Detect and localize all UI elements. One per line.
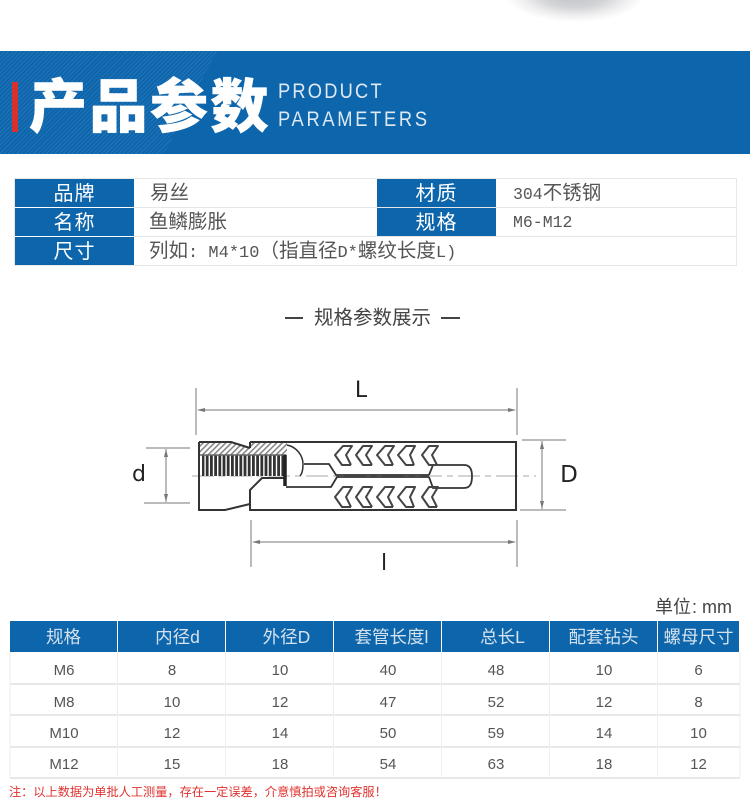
material value: 304不锈钢 bbox=[513, 183, 601, 205]
row M6: 6 bbox=[694, 662, 703, 679]
specification value: M6-M12 bbox=[513, 213, 572, 232]
dimension D bbox=[520, 440, 578, 510]
specification label bbox=[377, 208, 496, 236]
brand value: 易丝 bbox=[150, 183, 189, 205]
row M10: M10 bbox=[49, 725, 79, 742]
dimension d: d bbox=[132, 462, 146, 487]
row M6 bbox=[54, 662, 703, 679]
dimension D: D bbox=[560, 462, 578, 488]
size label bbox=[15, 237, 134, 265]
anchor body bbox=[199, 442, 516, 510]
row M10: 50 bbox=[380, 725, 396, 742]
dimension L bbox=[196, 378, 517, 435]
row M12: 12 bbox=[690, 756, 707, 773]
banner subtitle bbox=[278, 79, 430, 130]
row M10: 12 bbox=[164, 725, 180, 742]
red accent bar bbox=[12, 82, 18, 132]
anchor diagram bbox=[132, 378, 578, 576]
row M8: M8 bbox=[54, 694, 74, 711]
size label: 尺寸 bbox=[54, 241, 96, 263]
spec table bbox=[14, 178, 737, 266]
bottom row of chevrons bbox=[335, 487, 438, 507]
table header: 套管长度l bbox=[355, 627, 428, 647]
table header: 外径D bbox=[263, 627, 310, 647]
brand label: 品牌 bbox=[54, 183, 96, 205]
row M12: 15 bbox=[164, 756, 180, 773]
row M10 bbox=[49, 725, 707, 742]
banner bbox=[0, 51, 750, 154]
hatched cone section bbox=[199, 442, 250, 455]
dimension L: L bbox=[355, 378, 368, 403]
row M8 bbox=[54, 694, 703, 711]
banner hatch pattern bbox=[0, 51, 220, 154]
material label bbox=[377, 179, 496, 207]
dimension d bbox=[132, 448, 190, 503]
unit label: 单位: mm bbox=[655, 597, 732, 617]
table header: 内径d bbox=[155, 627, 200, 647]
row M8: 12 bbox=[596, 694, 612, 711]
row M8: 47 bbox=[380, 694, 396, 711]
section heading: 规格参数展示 bbox=[314, 307, 431, 329]
row M12: 18 bbox=[272, 756, 288, 773]
row M8: 52 bbox=[488, 694, 504, 711]
row M6: 10 bbox=[596, 662, 612, 679]
banner subtitle: PARAMETERS bbox=[278, 106, 430, 130]
banner title: 产品参数 bbox=[29, 60, 271, 144]
data table bbox=[10, 621, 740, 779]
row M8: 12 bbox=[272, 694, 288, 711]
row M8: 10 bbox=[164, 694, 180, 711]
table grid bbox=[10, 652, 740, 779]
row M10: 14 bbox=[596, 725, 612, 742]
row M10: 10 bbox=[690, 725, 707, 742]
brand label bbox=[15, 179, 134, 207]
footnote: 注：以上数据为单批人工测量，存在一定误差，介意慎拍或咨询客服！ bbox=[9, 782, 387, 800]
row M10: 59 bbox=[488, 725, 504, 742]
row M12: 63 bbox=[488, 756, 504, 773]
top row of chevrons bbox=[335, 446, 438, 465]
table header bbox=[10, 621, 739, 652]
row M6: 8 bbox=[168, 662, 176, 679]
row dividers bbox=[133, 207, 737, 208]
row M12: 18 bbox=[596, 756, 612, 773]
row M10: 14 bbox=[272, 725, 288, 742]
name label: 名称 bbox=[54, 212, 96, 234]
row M6: 48 bbox=[488, 662, 504, 679]
table header: 规格 bbox=[46, 627, 81, 647]
name label bbox=[15, 208, 134, 236]
table header: 螺母尺寸 bbox=[664, 627, 734, 647]
row M6: 10 bbox=[272, 662, 288, 679]
dimension l bbox=[251, 520, 517, 576]
row M12 bbox=[49, 756, 707, 773]
material label: 材质 bbox=[416, 183, 458, 205]
banner subtitle: PRODUCT bbox=[278, 79, 384, 103]
row M6: M6 bbox=[54, 662, 74, 679]
table header: 总长L bbox=[480, 627, 525, 647]
dimension l: l bbox=[381, 551, 387, 576]
top shadow blur bbox=[505, 0, 645, 22]
row M8: 8 bbox=[694, 694, 703, 711]
table header: 配套钻头 bbox=[568, 627, 638, 647]
name value: 鱼鳞膨胀 bbox=[149, 212, 227, 234]
row M12: M12 bbox=[49, 756, 79, 773]
row M12: 54 bbox=[380, 756, 396, 773]
size value: 列如: M4*10（指直径D*螺纹长度L) bbox=[149, 241, 456, 263]
centre line bbox=[192, 475, 536, 477]
specification label: 规格 bbox=[416, 212, 458, 234]
row M6: 40 bbox=[380, 662, 396, 679]
